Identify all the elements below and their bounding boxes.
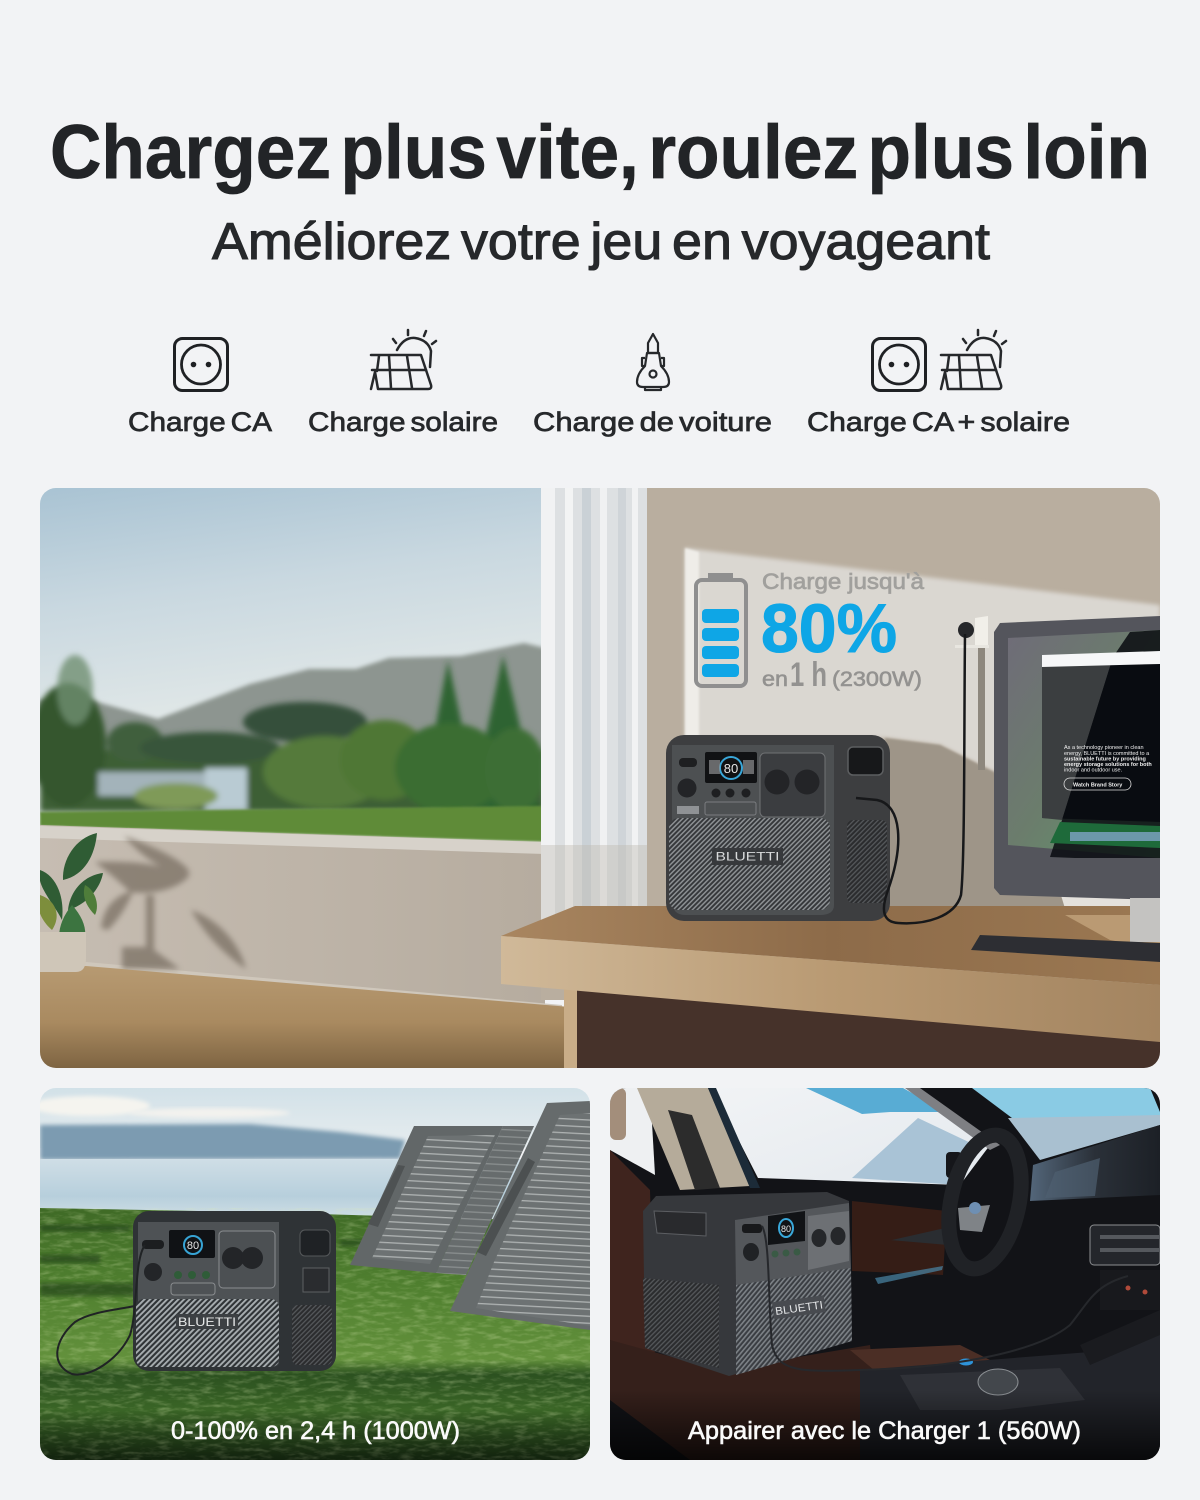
- lawn device controls: [142, 1240, 215, 1295]
- side mirror: [946, 1152, 962, 1178]
- power station on lawn: [133, 1211, 336, 1371]
- power station: BLUETTI Elite 200: [666, 735, 890, 921]
- car device sockets: [808, 1211, 849, 1270]
- bottom fade: [610, 1390, 1160, 1460]
- plant in white pot: [38, 833, 103, 972]
- text: Charge jusqu'à: Charge jusqu'à: [762, 569, 925, 594]
- windows and sky: [610, 1088, 1160, 1185]
- screen text: As a technology pioneer in clean: [1064, 745, 1144, 751]
- text: en 1 h (2300W): 1 h: [790, 656, 827, 694]
- charging cable: [856, 634, 965, 923]
- sea: [40, 1159, 521, 1220]
- center vents: [1090, 1225, 1160, 1310]
- text: en 1 h (2300W): (2300W): [832, 668, 922, 691]
- car cable: [762, 1226, 1128, 1371]
- car device controls: [742, 1224, 800, 1261]
- desk: [501, 898, 1160, 1068]
- label: Charge solaire: Charge solaire: [308, 407, 498, 437]
- car device display: 80: [781, 1224, 791, 1234]
- panel: solar charging on lawn: [30, 1088, 590, 1460]
- car interior base: [610, 1088, 1160, 1460]
- caption: car charging power: Appairer avec le Charger 1 (560W): [688, 1417, 1081, 1445]
- device display: [705, 752, 757, 783]
- text: 80%: 80%: [761, 590, 897, 667]
- panel: car charging interior: [610, 1088, 1160, 1460]
- label: Charge CA + solaire: Charge CA + solaire: [807, 407, 1070, 437]
- lawn device logo: [176, 1314, 238, 1329]
- screen text: indoor and outdoor use.: [1064, 768, 1123, 774]
- screen text: sustainable future by providing: [1064, 756, 1146, 762]
- solar panels: [350, 1101, 590, 1330]
- BLUETTI logo: [712, 848, 783, 865]
- monitor: [994, 616, 1160, 900]
- icon: solar panel: [371, 330, 436, 389]
- charging modes row: [128, 330, 1070, 437]
- keyboard: [971, 935, 1160, 962]
- label: Charge de voiture: Charge de voiture: [533, 407, 772, 437]
- device sockets: [760, 753, 825, 817]
- distant hills: [40, 1124, 405, 1160]
- leather seat: [610, 1088, 990, 1460]
- text: en 1 h (2300W): [762, 661, 921, 691]
- BLUETTI logo: BLUETTI: [716, 850, 780, 864]
- subtitle: Améliorez votre jeu en voyageant: [212, 213, 991, 271]
- lawn device logo: BLUETTI: [178, 1317, 236, 1329]
- screen text: energy, BLUETTI is committed to a: [1064, 751, 1150, 757]
- callout: 80% in one hour: [696, 569, 925, 694]
- wall outlet and cable: [955, 616, 989, 770]
- screen text: energy storage solutions for both: [1064, 762, 1152, 768]
- title: Chargez plus vite, roulez plus loin: [50, 110, 1150, 195]
- text: en 1 h (2300W): en: [762, 668, 788, 691]
- bottom fade: [40, 1419, 590, 1460]
- window landscape: [30, 488, 545, 842]
- device controls: [677, 758, 756, 815]
- screen text: [1064, 745, 1152, 774]
- screen button: Watch Brand Story: [1073, 782, 1123, 788]
- device display: 80: [724, 761, 738, 776]
- wood floor: [40, 966, 570, 1068]
- icon: AC socket: [174, 338, 228, 390]
- car device logo: BLUETTI: [775, 1299, 824, 1318]
- center console: [860, 1310, 1160, 1460]
- caption: solar charging time: 0-100% en 2,4 h (1000W): [171, 1417, 460, 1445]
- lawn device display: 80: [187, 1240, 199, 1252]
- icon: car charger: [637, 334, 669, 390]
- sky and clouds: [30, 1088, 590, 1148]
- lawn cable: [57, 1245, 145, 1375]
- door pillar and seat belt: [637, 1088, 1000, 1190]
- icon: AC socket plus solar panel: [872, 330, 1006, 390]
- panel: AC charging in living room: [30, 488, 1160, 1068]
- low wall below window: [40, 825, 562, 1012]
- icon: battery: [696, 573, 746, 686]
- lawn device display: [169, 1230, 215, 1258]
- dashboard display: [1030, 1125, 1160, 1201]
- screen button: [1064, 778, 1131, 790]
- wall with sunlight patch: [541, 488, 1160, 1000]
- car device logo: [772, 1295, 826, 1319]
- power station on seat: [643, 1192, 852, 1376]
- door panel: [852, 1201, 948, 1284]
- steering wheel: [938, 1128, 1032, 1276]
- lawn device sockets: [219, 1231, 275, 1288]
- label: Charge CA: Charge CA: [128, 407, 272, 437]
- curtain: [541, 488, 647, 927]
- car device display: [768, 1211, 805, 1245]
- grass: [40, 1208, 590, 1460]
